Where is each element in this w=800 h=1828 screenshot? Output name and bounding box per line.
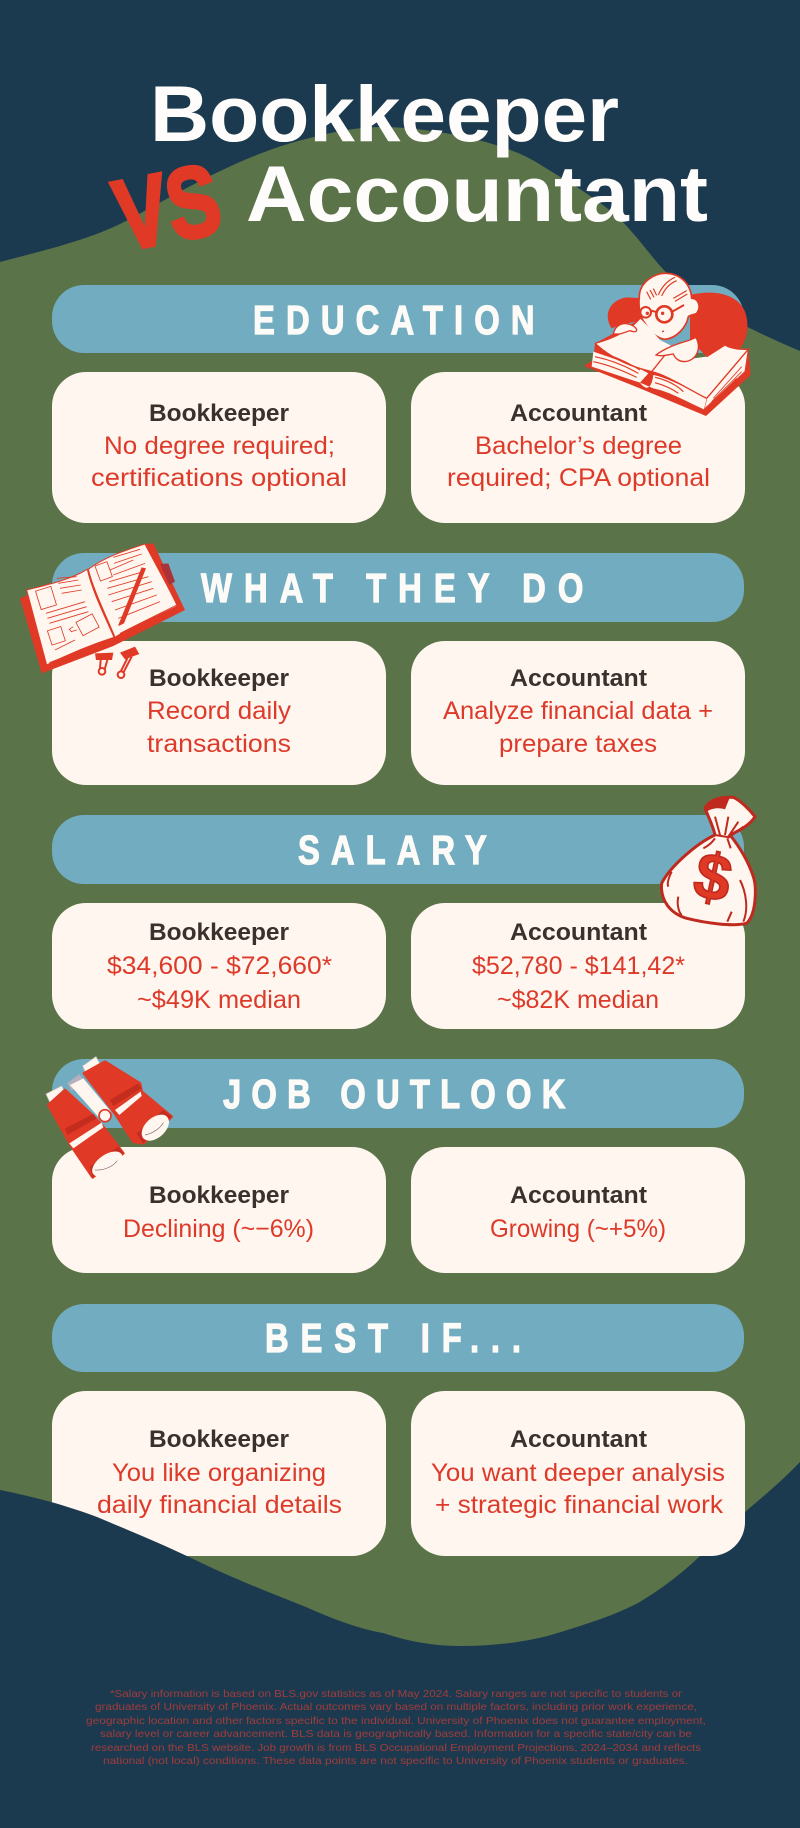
card: bookkeeper salary: ~$49K median	[137, 986, 301, 1014]
education heading: EDUCATION	[253, 296, 535, 343]
best if heading: BEST IF...	[265, 1314, 521, 1361]
card: bookkeeper salary: $34,600 - $72,660*	[107, 952, 332, 980]
card: bookkeeper education: certifications optional	[91, 464, 347, 492]
card: bookkeeper outlook	[52, 1147, 386, 1273]
job outlook heading bar	[52, 1059, 744, 1128]
footnote: researched on the BLS website. Job growth is from BLS Occupational Employment Projections, 2024–2034 and reflects	[91, 1742, 701, 1754]
card: bookkeeper education: Bookkeeper	[149, 400, 289, 427]
job outlook heading: JOB OUTLOOK	[223, 1070, 566, 1117]
card: bookkeeper duties: Record daily	[147, 697, 292, 725]
best if heading bar	[52, 1304, 744, 1372]
card: accountant education	[411, 372, 745, 523]
card: accountant salary	[411, 903, 745, 1029]
section: education	[52, 285, 745, 523]
card: accountant best if: + strategic financial work	[435, 1491, 724, 1519]
icon: man reading book	[584, 273, 751, 416]
card: bookkeeper salary	[52, 903, 386, 1029]
footnote: national (not local) conditions. These data points are not specific to University of Phoenix students or graduates.	[103, 1755, 688, 1767]
card: bookkeeper outlook: Bookkeeper	[149, 1182, 289, 1209]
title: Bookkeeper	[150, 69, 619, 158]
footnote: salary level or career advancement. BLS data is geographically based. Information for a specific state/city can be	[100, 1728, 692, 1740]
footnote: geographic location and other factors specific to the individual. University of Phoenix does not guarantee employment,	[86, 1715, 706, 1727]
card: accountant education: required; CPA optional	[447, 464, 710, 492]
card: bookkeeper outlook: Declining (~−6%)	[123, 1215, 314, 1243]
card: accountant duties: Analyze financial data +	[443, 697, 713, 725]
icon: money bag: $	[688, 837, 738, 916]
card: accountant outlook	[411, 1147, 745, 1273]
what they do heading bar	[52, 553, 744, 622]
background: navy bottom wave	[0, 1462, 800, 1828]
vs label: VS	[106, 144, 229, 273]
card: accountant outlook: Accountant	[510, 1182, 647, 1209]
icon: money bag	[661, 797, 755, 925]
icon: binoculars	[46, 1057, 174, 1182]
salary heading bar	[52, 815, 744, 884]
card: accountant best if: You want deeper analysis	[431, 1459, 725, 1487]
card: accountant duties: Accountant	[510, 665, 647, 692]
footnote	[86, 1688, 706, 1767]
card: accountant education: Bachelor’s degree	[475, 432, 682, 460]
card: bookkeeper education: No degree required;	[104, 432, 335, 460]
card: bookkeeper duties: transactions	[147, 730, 291, 758]
icon: open notebook with pencil	[20, 543, 185, 678]
salary heading: SALARY	[298, 826, 487, 873]
card: bookkeeper duties: Bookkeeper	[149, 665, 289, 692]
title: Accountant	[246, 149, 708, 238]
card: bookkeeper duties	[52, 641, 386, 785]
card: accountant salary: Accountant	[510, 919, 647, 946]
card: accountant salary: $52,780 - $141,42*	[472, 952, 685, 980]
card: accountant duties: prepare taxes	[499, 730, 657, 758]
card: bookkeeper best if text: daily financial details	[97, 1491, 342, 1519]
card: bookkeeper best if background	[52, 1391, 386, 1556]
education heading bar	[52, 285, 744, 353]
card: bookkeeper best if text: You like organizing	[112, 1459, 326, 1487]
card: bookkeeper best if text: Bookkeeper	[149, 1426, 289, 1453]
title	[150, 69, 708, 238]
card: bookkeeper best if text	[97, 1426, 342, 1519]
card: accountant salary: ~$82K median	[497, 986, 659, 1014]
section: salary	[52, 815, 745, 1029]
card: accountant outlook: Growing (~+5%)	[490, 1215, 666, 1243]
footnote: *Salary information is based on BLS.gov statistics as of May 2024. Salary ranges are not specific to students or	[110, 1688, 683, 1700]
card: bookkeeper education	[52, 372, 386, 523]
card: accountant best if: Accountant	[510, 1426, 647, 1453]
card: bookkeeper salary: Bookkeeper	[149, 919, 289, 946]
what they do heading: WHAT THEY DO	[201, 564, 583, 611]
card: accountant duties	[411, 641, 745, 785]
card: accountant education: Accountant	[510, 400, 647, 427]
section: what they do	[52, 553, 745, 785]
section: job outlook	[52, 1059, 745, 1273]
card: accountant best if	[411, 1391, 745, 1556]
footnote: graduates of University of Phoenix. Actual outcomes vary based on multiple factors, including prior work experience,	[95, 1701, 697, 1713]
